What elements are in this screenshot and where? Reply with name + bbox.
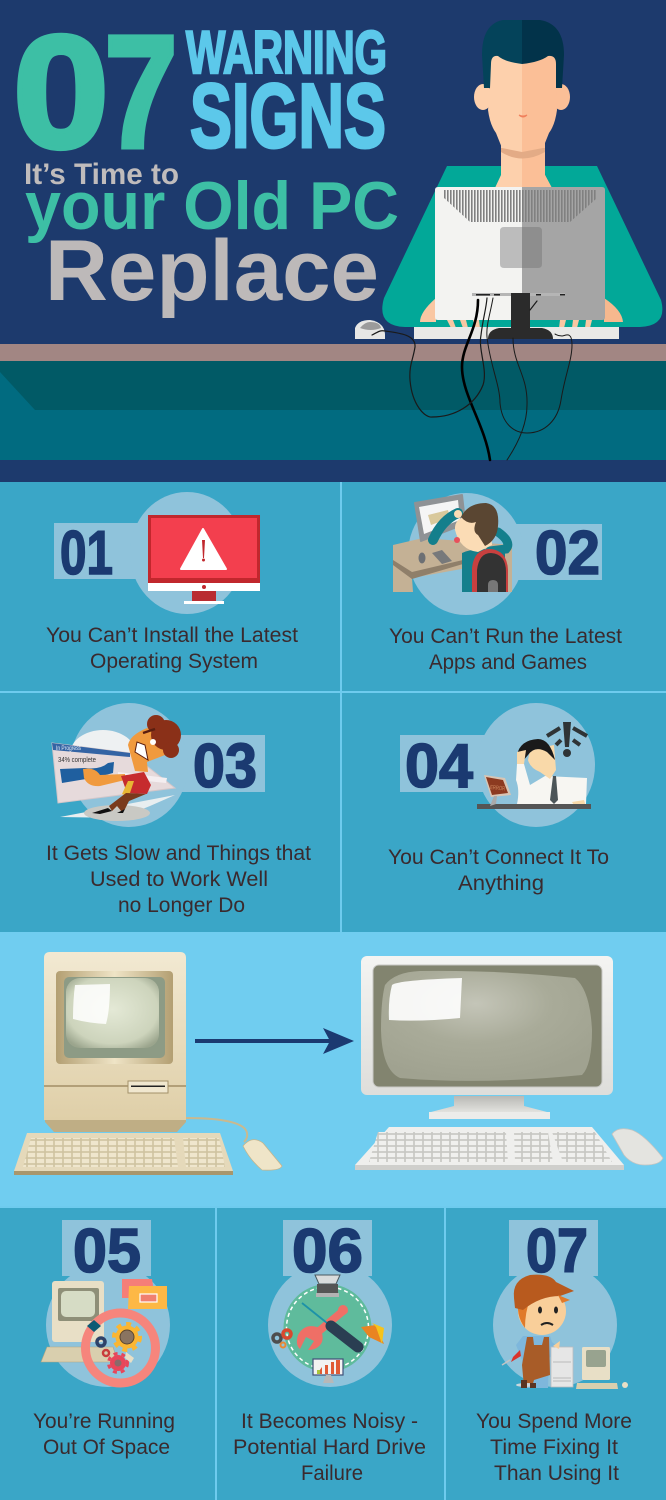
old computer screen xyxy=(56,971,173,1064)
keyboard xyxy=(414,327,619,339)
caption xyxy=(233,1410,426,1485)
sign 03 xyxy=(46,703,311,917)
monitor screen xyxy=(373,965,602,1087)
badge backdrop xyxy=(70,703,265,827)
caption: Failure xyxy=(301,1462,363,1485)
caption: Potential Hard Drive xyxy=(233,1436,426,1459)
new mouse xyxy=(612,1129,663,1165)
title: Replace: Replace xyxy=(45,223,379,319)
ears xyxy=(474,84,492,110)
caption: You Can’t Install the Latest xyxy=(46,624,298,647)
grid panel: signs 5 to 7 xyxy=(0,1206,666,1500)
sign 06 xyxy=(233,1217,426,1485)
old computer base xyxy=(45,1120,186,1132)
caption: You Can’t Connect It To xyxy=(388,846,609,869)
old keyboard xyxy=(14,1133,233,1171)
caption xyxy=(388,846,609,895)
hair xyxy=(482,20,522,88)
mouse xyxy=(355,320,385,339)
old computer xyxy=(14,952,282,1175)
caption: no Longer Do xyxy=(118,894,245,917)
title: 07: 0 xyxy=(13,2,109,181)
caption: Out Of Space xyxy=(43,1436,170,1459)
caption: Anything xyxy=(458,872,544,895)
caption: It Gets Slow and Things that xyxy=(46,842,311,865)
caption xyxy=(476,1410,632,1485)
header panel xyxy=(0,0,666,482)
badge backdrop xyxy=(54,492,244,614)
arrow xyxy=(195,1028,354,1054)
icon: alert monitor xyxy=(148,515,260,604)
caption: You Spend More xyxy=(476,1410,632,1433)
sign 04 xyxy=(388,703,609,895)
desk front dark band xyxy=(0,361,666,410)
caption: It Becomes Noisy - xyxy=(241,1410,418,1433)
badge backdrop xyxy=(408,493,602,615)
grid panel: signs 1 to 4 xyxy=(0,482,666,932)
monitor centre plate xyxy=(500,227,522,268)
icon: old computer with gears and folders xyxy=(41,1279,167,1383)
caption: Operating System xyxy=(90,650,258,673)
icon: man pulling progress bar: 34% complete xyxy=(58,757,96,764)
icon: confused man with no wifi: ERROR xyxy=(490,785,506,793)
sign 05 xyxy=(33,1217,175,1459)
caption: Time Fixing It xyxy=(490,1436,618,1459)
sign 07 xyxy=(476,1217,632,1485)
torso and arms xyxy=(382,166,662,327)
caption: Used to Work Well xyxy=(90,868,268,891)
monitor stand xyxy=(431,1096,547,1112)
title: WARNING: WARNING xyxy=(186,19,387,86)
monitor back xyxy=(435,187,522,320)
mouth xyxy=(519,115,527,117)
caption: Apps and Games xyxy=(429,651,587,674)
number 05: 05 xyxy=(73,1217,141,1286)
desk front light band xyxy=(0,372,666,460)
title: 07 xyxy=(13,2,178,181)
title: your Old PC: your Old PC xyxy=(25,168,399,244)
number 01: 01 xyxy=(60,519,113,588)
new computer xyxy=(355,956,663,1170)
monitor stand xyxy=(488,293,553,339)
caption xyxy=(46,624,298,673)
monitor frame xyxy=(361,956,613,1095)
sign 02 xyxy=(389,493,622,674)
icon: frustrated gamer at desk xyxy=(393,495,512,592)
illustration: man at computer xyxy=(355,20,662,460)
desk top xyxy=(0,344,666,361)
number 07: 07 xyxy=(526,1217,588,1286)
caption xyxy=(33,1410,175,1459)
icon: repair tools xyxy=(273,1275,384,1383)
caption: Than Using It xyxy=(494,1462,619,1485)
number 04: 04 xyxy=(405,732,474,801)
port strip xyxy=(472,293,565,296)
comparison panel: old PC to new PC xyxy=(0,932,666,1207)
icon: confused man with no wifi xyxy=(477,722,591,809)
number 02: 02 xyxy=(535,519,600,588)
new keyboard xyxy=(355,1127,624,1165)
floppy slot xyxy=(128,1081,168,1093)
neck xyxy=(494,140,553,190)
badge backdrop xyxy=(400,703,595,827)
title: It's Time to: It’s Time to xyxy=(24,158,179,191)
face xyxy=(488,56,522,152)
icon: man pulling progress bar xyxy=(52,715,181,821)
icon: sad repairman xyxy=(502,1275,628,1389)
number 06: 06 xyxy=(292,1217,363,1286)
caption: You Can’t Run the Latest xyxy=(389,625,622,648)
old mouse xyxy=(243,1140,282,1170)
title: SIGNS: SIGNS xyxy=(190,66,386,167)
badge backdrop xyxy=(46,1220,170,1387)
caption xyxy=(389,625,622,674)
caption xyxy=(46,842,311,917)
title: 07: 7 xyxy=(104,2,178,181)
cables xyxy=(372,298,572,460)
icon: man pulling progress bar: In Progress xyxy=(56,746,81,752)
badge backdrop xyxy=(268,1220,392,1387)
monitor vents xyxy=(444,190,597,222)
old computer body xyxy=(44,952,186,1120)
hands xyxy=(420,298,436,322)
number 03: 03 xyxy=(193,732,257,801)
fingers xyxy=(447,320,592,328)
badge backdrop xyxy=(493,1220,617,1387)
caption: You’re Running xyxy=(33,1410,175,1433)
mouse cable xyxy=(186,1118,247,1142)
sign 01 xyxy=(46,492,298,673)
